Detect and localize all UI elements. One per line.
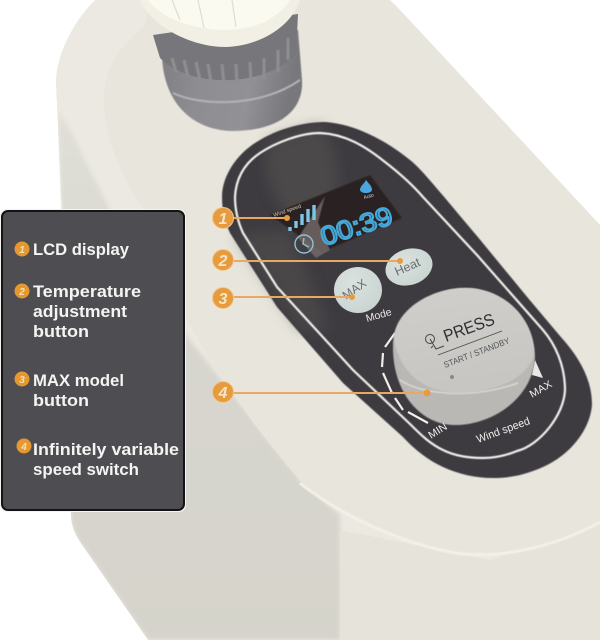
legend item 1: 1	[19, 245, 25, 256]
dark capsule	[222, 122, 592, 478]
Wind speed label: Wind speed	[475, 415, 532, 446]
callout 2	[212, 250, 403, 270]
legend item 3: 3	[19, 375, 25, 386]
legend item 4: speed switch	[33, 461, 139, 479]
PRESS: PRESS	[441, 310, 497, 346]
callout 1: 1	[219, 211, 228, 228]
filter cartridge	[140, 0, 302, 131]
wind speed tiny label: Wind speed	[273, 204, 302, 219]
legend item 2: Temperature	[33, 283, 141, 301]
legend item 3: button	[33, 392, 89, 410]
legend item 3	[14, 372, 124, 410]
legend item 2: button	[33, 323, 89, 341]
legend panel	[0, 209, 186, 512]
legend item 4: Infinitely variable	[33, 441, 179, 459]
MAX button	[334, 267, 382, 313]
Heat button	[381, 242, 437, 292]
control panel	[222, 122, 592, 478]
legend item 4: 4	[20, 442, 27, 453]
legend item 2: 2	[18, 287, 25, 298]
callout 4: 4	[218, 385, 228, 402]
ribbed ring	[153, 14, 298, 80]
legend item 2	[14, 283, 141, 341]
callout 1	[212, 208, 290, 228]
signal bars	[290, 205, 314, 231]
flame	[360, 180, 372, 193]
MAX button: MAX	[340, 276, 369, 302]
legend item 4	[16, 438, 179, 479]
white inline	[235, 133, 565, 458]
rotary knob	[393, 288, 535, 425]
callout 2: 2	[218, 253, 228, 270]
legend item 1: LCD display	[33, 241, 130, 259]
LCD display	[270, 175, 402, 258]
time: 00:39	[317, 200, 396, 252]
callout 3: 3	[219, 291, 228, 308]
mode tiny label: Auto	[363, 193, 375, 201]
white collar	[140, 0, 300, 47]
callout 4	[212, 382, 430, 402]
start standby: START / STANDBY	[442, 335, 511, 370]
MAX label: MAX	[528, 378, 554, 401]
clock	[295, 235, 313, 253]
press icon	[426, 334, 444, 349]
Mode label: Mode	[365, 306, 393, 325]
callout 3	[212, 288, 355, 308]
legend item 3: MAX model	[33, 372, 124, 390]
grey cup	[160, 30, 302, 131]
legend item 2: adjustment	[33, 303, 128, 321]
MIN label: MIN	[426, 421, 450, 442]
speed arc ticks	[382, 333, 428, 423]
Heat button: Heat	[393, 255, 423, 279]
